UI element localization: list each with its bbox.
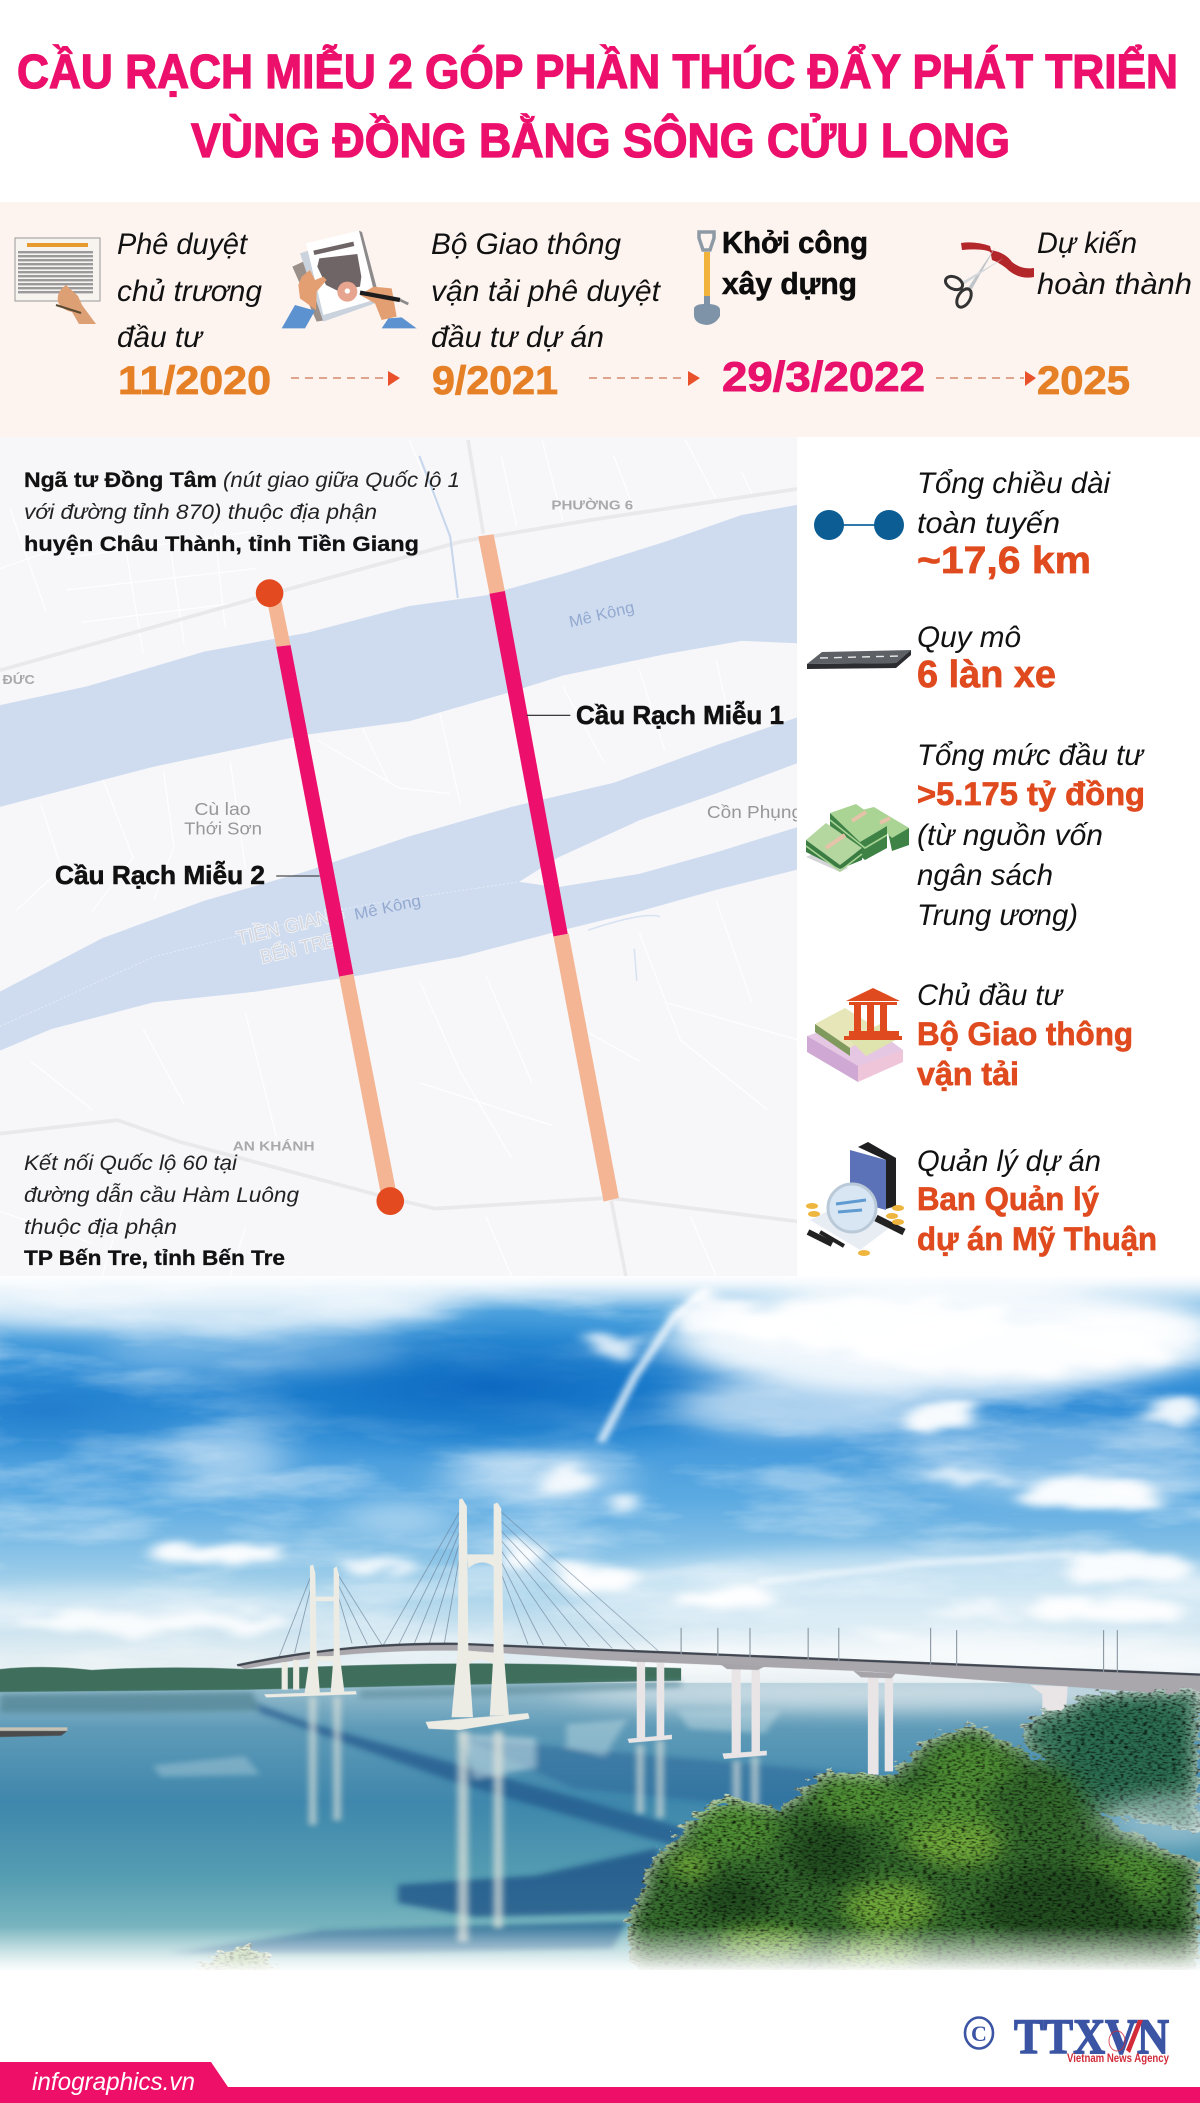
text: step 2: vận tải phê duyệt [431,275,662,308]
icon: hands signing document [282,231,417,328]
line: bridge 1 [478,534,619,1202]
map place labels: Cồn Phụng [707,802,802,822]
marker: end point [376,1187,404,1215]
text: total investment: >5.175 tỷ đồng [917,776,1145,812]
text: step 1 [117,228,271,403]
text: total investment [917,739,1145,932]
footer band [0,2062,1200,2103]
text: step 3 [722,225,925,400]
boat [0,1727,67,1737]
marker: start point [256,579,283,607]
logo: TTXVN: C [971,2021,987,2046]
sky [0,1270,1200,1690]
panel: timeline [0,202,1200,437]
logo: TTXVN: TTXVN [1014,2008,1169,2064]
text: project manager [917,1145,1157,1257]
reflections [153,1703,865,1953]
icon: shovel [694,232,720,325]
map place labels [3,497,802,1154]
map place labels: Mê Kông [353,892,422,924]
text: step 4: hoàn thành [1037,268,1192,301]
text: total length: ~17,6 km [917,540,1091,582]
text: step 1: chủ trương [117,275,262,308]
bridge towers and deck [237,1498,1200,1775]
text: step 4: Dự kiến [1037,227,1137,260]
label: end location: Kết nối Quốc lộ 60 tại [24,1152,238,1175]
text: step 2: đầu tư dự án [431,321,604,354]
icon: document with hand [15,238,100,324]
trees [180,1690,1200,1980]
label: start location: Ngã tư Đồng Tâm [24,469,217,492]
label: start location: (nút giao giữa Quốc lộ 1 [223,469,460,492]
text: scale: Quy mô [917,621,1021,654]
map place labels: TIỀN GIANG [235,902,346,949]
text: investor: Chủ đầu tư [917,979,1064,1012]
text: total investment: ngân sách [917,859,1053,892]
text: total length: toàn tuyến [917,507,1060,540]
label: start location: huyện Châu Thành, tỉnh Tiền Giang [24,533,419,556]
map place labels: BẾN TRE [258,929,338,968]
clouds [0,1281,1200,1683]
text: project manager: dự án Mỹ Thuận [917,1221,1157,1257]
text: total investment: Tổng mức đầu tư [917,739,1145,772]
label: end location [24,1152,299,1270]
panel: map [0,437,802,1280]
text: step 3: xây dựng [722,266,857,301]
icon: binders and documents [806,1142,904,1256]
text: investor: vận tải [917,1056,1019,1092]
line: bridge 2 [267,601,398,1203]
panel: key facts [806,467,1157,1257]
arrow: step 3 to 4 [936,371,1036,386]
text: scale [917,621,1056,696]
title [17,44,1178,168]
text: total length: Tổng chiều dài [917,467,1111,500]
icon: money stacks [806,804,909,872]
text: investor: Bộ Giao thông [917,1016,1133,1052]
label: Cầu Rạch Miễu 2: Cầu Rạch Miễu 2 [55,860,265,890]
photo: cable-stayed bridge over river [0,1270,1200,1981]
river: upper channel [0,504,802,807]
map place labels: ĐỨC [3,672,35,687]
text: total length [917,467,1111,582]
label: start location: với đường tỉnh 870) thuộc địa phận [24,501,377,524]
map place labels: AN KHÁNH [233,1138,315,1154]
map place labels: Cù lao [194,799,251,819]
text: step 4: 2025 [1037,359,1130,403]
text: step 2 [431,228,662,403]
text: step 2: 9/2021 [432,359,558,403]
text: step 1: đầu tư [117,321,204,354]
text: step 1: 11/2020 [118,359,271,403]
text: total investment: (từ nguồn vốn [917,819,1103,852]
icon: scissors and ribbon [943,242,1034,310]
map place labels: PHƯỜNG 6 [551,497,633,513]
icon: road [807,650,911,669]
text: investor [917,979,1133,1092]
map place labels: Mê Kông [567,599,636,631]
text: total investment: Trung ương) [917,899,1078,932]
text: step 2: Bộ Giao thông [431,228,621,261]
text: project manager: Ban Quản lý [917,1181,1099,1217]
label: end location: đường dẫn cầu Hàm Luông [24,1184,299,1207]
water [0,1683,1200,1981]
map place labels: Thới Sơn [184,818,262,839]
label: end location: thuộc địa phận [24,1216,177,1239]
text: scale: 6 làn xe [917,654,1056,696]
label: end location: TP Bến Tre, tỉnh Bến Tre [24,1247,285,1270]
text: project manager: Quản lý dự án [917,1145,1101,1178]
river: lower channel [0,716,802,1051]
label: start location [24,469,460,556]
footer site name: infographics.vn [32,2068,195,2096]
roads [0,440,802,1280]
tree line on far bank [0,1664,681,1713]
text: step 1: Phê duyệt [117,228,249,261]
text: step 4 [1037,227,1192,403]
arrow: step 2 to 3 [589,371,700,386]
logo: TTXVN: Vietnam News Agency [1067,2051,1169,2065]
icon: bank with money [807,988,903,1082]
logo: TTXVN [965,2008,1169,2065]
icon: route length [814,510,904,540]
text: step 3: 29/3/2022 [722,353,925,400]
label: Cầu Rạch Miễu 1: Cầu Rạch Miễu 1 [576,700,784,730]
title: VÙNG ĐỒNG BẰNG SÔNG CỬU LONG [191,113,1010,168]
map base in source coordinates [0,440,802,1280]
text: step 3: Khởi công [722,225,868,260]
fades [0,1275,1200,1311]
arrow: step 1 to 2 [291,371,400,386]
